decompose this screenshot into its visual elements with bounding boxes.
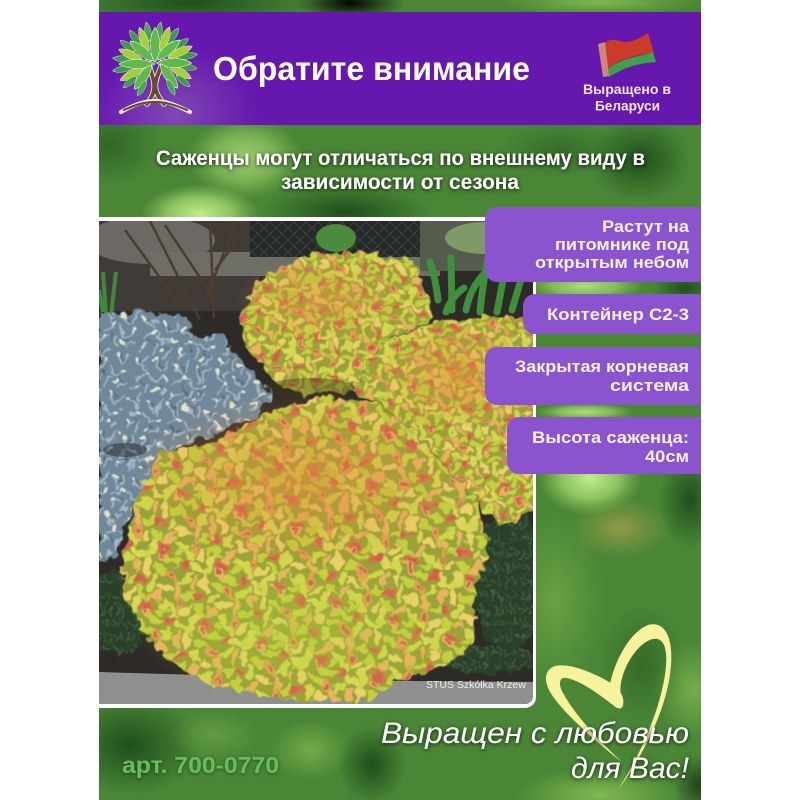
pill: seedling height: 40см — [645, 447, 689, 466]
pill: closed root system: Закрытая корневая — [515, 357, 689, 376]
icon: yellow heart — [546, 624, 671, 790]
subtitle: Саженцы могут отличаться по внешнему виду в — [156, 147, 645, 170]
background: green bokeh — [99, 0, 701, 800]
header band — [99, 12, 701, 125]
badge text: grown in Belarus — [583, 82, 671, 114]
pill: grown outdoors: питомнике под — [555, 235, 689, 254]
pill: closed root system: система — [610, 376, 690, 395]
subtitle — [156, 147, 645, 194]
subtitle: зависимости от сезона — [281, 171, 519, 194]
pill: grown outdoors: открытым небом — [535, 253, 689, 272]
pill: container — [523, 294, 701, 334]
badge text: grown in Belarus: Беларуси — [595, 98, 660, 114]
photo: spirea bushes with white frame — [85, 216, 548, 708]
title: Обратите внимание — [213, 50, 530, 87]
pill: seedling height: Высота саженца: — [532, 428, 689, 447]
slogan: Выращен с любовью — [381, 717, 689, 750]
slogan — [381, 717, 690, 785]
slogan: для Вас! — [571, 752, 690, 785]
photo: spirea bushes with white frame: STUS Szkółka Krzew — [426, 679, 526, 691]
icon: tree logo — [112, 22, 198, 112]
badge text: grown in Belarus: Выращено в — [583, 82, 671, 97]
icon: Belarus flag — [598, 33, 656, 77]
pill: seedling height — [507, 417, 701, 474]
pill: grown outdoors: Растут на — [602, 217, 690, 236]
pill: container: Контейнер С2-3 — [547, 305, 689, 324]
pill: closed root system — [485, 347, 701, 405]
pill: grown outdoors — [485, 207, 701, 282]
article number: арт. 700-0770 — [122, 752, 279, 778]
